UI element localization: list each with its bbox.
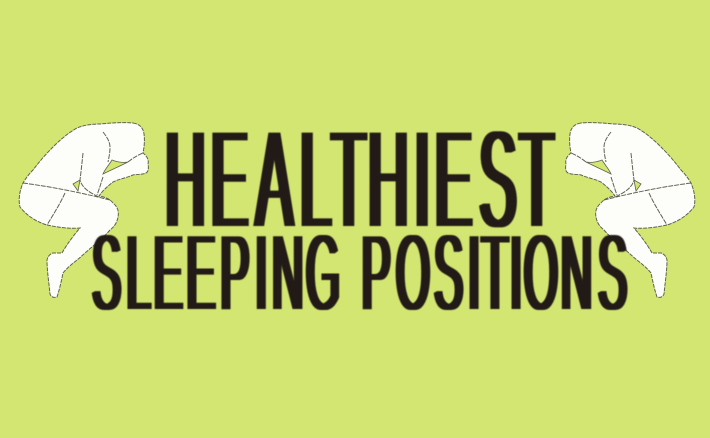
subtitle: SLEEPING POSITIONS: SLEEPING POSITIONS: [92, 212, 627, 334]
illustration: left curled sleeping figure: [19, 123, 148, 297]
title: HEALTHIEST: HEALTHIEST: [165, 100, 554, 258]
illustration: right curled sleeping figure: [566, 123, 695, 297]
